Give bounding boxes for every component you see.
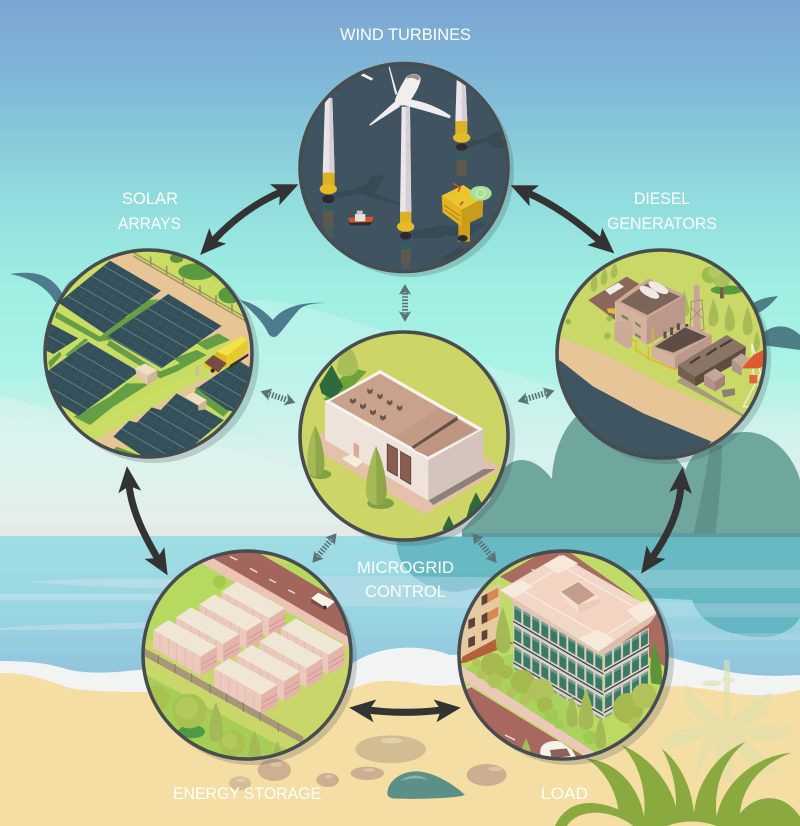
background: island reflection	[397, 537, 800, 637]
panel: load circle	[450, 548, 683, 773]
arrow: solar to storage	[129, 485, 158, 559]
van	[311, 593, 335, 610]
background: sky	[0, 0, 800, 537]
fence and trees	[133, 250, 250, 321]
panel: solar arrays circle	[40, 245, 260, 465]
equipment boxes	[135, 363, 207, 411]
yellow truck	[204, 336, 248, 374]
low-poly trees	[144, 686, 282, 760]
background: water highlights	[0, 579, 175, 630]
road	[202, 552, 349, 648]
back road	[500, 550, 677, 673]
label: load: LOAD	[541, 784, 588, 803]
label: diesel generators: GENERATORS	[607, 214, 717, 233]
blade fragment	[361, 73, 373, 81]
engine hall	[652, 323, 712, 370]
arrow: control to solar	[269, 394, 287, 400]
label: energy storage: ENERGY STORAGE	[173, 784, 321, 803]
stones	[229, 735, 507, 799]
offshore substation	[442, 183, 492, 242]
background: sand	[0, 673, 800, 826]
arrow: wind to diesel	[528, 193, 600, 241]
background: faint palm on sand	[662, 660, 793, 783]
background: right bird	[240, 300, 328, 337]
background: horizon shadow	[462, 533, 800, 537]
arrow: storage to load	[368, 710, 442, 712]
label: solar arrays: ARRAYS	[118, 214, 181, 233]
grass strips	[48, 299, 230, 460]
office building	[500, 555, 658, 721]
arrow: control to wind	[402, 293, 408, 313]
trees behind plant	[591, 263, 760, 352]
grass strip	[147, 676, 286, 758]
bush	[213, 576, 226, 588]
background: island silhouette	[462, 405, 800, 537]
pylon	[742, 343, 764, 408]
building shadow	[428, 469, 496, 505]
label: diesel generators: DIESEL	[634, 189, 690, 208]
grass tuft	[555, 742, 800, 826]
arrow: control to load	[478, 540, 491, 556]
arrow: wind to solar	[213, 192, 281, 241]
left shrubs	[472, 653, 657, 744]
parking lot	[566, 277, 639, 339]
label: microgrid control: MICROGRID	[357, 558, 454, 577]
back trees	[319, 345, 367, 400]
cone trees	[496, 607, 662, 757]
label: solar arrays: SOLAR	[122, 189, 178, 208]
foreground trees	[307, 426, 483, 535]
background: right water bands	[500, 570, 800, 640]
front ground	[450, 590, 683, 773]
tug boat	[348, 211, 373, 225]
shoreline	[558, 337, 741, 456]
perimeter wall	[145, 648, 303, 744]
arrow: control to diesel	[526, 393, 546, 399]
background: foam	[0, 648, 800, 700]
solar roads	[96, 254, 250, 449]
delivery van	[540, 741, 576, 762]
stack tower	[690, 285, 704, 330]
panel: energy storage circle	[140, 547, 360, 768]
label: microgrid control	[357, 558, 454, 601]
label: diesel generators	[607, 189, 717, 233]
neighbouring building	[457, 583, 513, 665]
background: left bird	[10, 273, 80, 302]
center turbine	[369, 67, 451, 272]
plinth	[305, 432, 502, 514]
arrow: control to storage	[318, 540, 331, 556]
left turbine tower	[320, 98, 337, 238]
circle shadows	[49, 67, 771, 765]
arrow: diesel to load	[652, 486, 681, 558]
background: center water band	[300, 576, 520, 608]
control building	[325, 370, 483, 501]
panel: diesel generators circle	[550, 245, 770, 467]
right turbine tower	[453, 80, 470, 176]
background: palm tree trunk	[693, 445, 722, 537]
solar panels	[45, 261, 257, 457]
panel: wind turbines circle	[298, 62, 510, 274]
background: pale clouds	[0, 299, 800, 537]
panel: microgrid control circle	[295, 328, 515, 548]
transformers	[678, 353, 752, 417]
main generator building	[614, 278, 685, 348]
worker	[196, 366, 199, 376]
background: sea	[0, 536, 800, 686]
generator hall	[678, 335, 746, 387]
battery containers	[153, 582, 344, 714]
label: wind turbines: WIND TURBINES	[340, 25, 471, 44]
label: solar arrays	[118, 189, 181, 233]
yellow pipes	[630, 327, 677, 369]
background: palm leaves	[750, 296, 800, 350]
label: microgrid control: CONTROL	[365, 582, 446, 601]
